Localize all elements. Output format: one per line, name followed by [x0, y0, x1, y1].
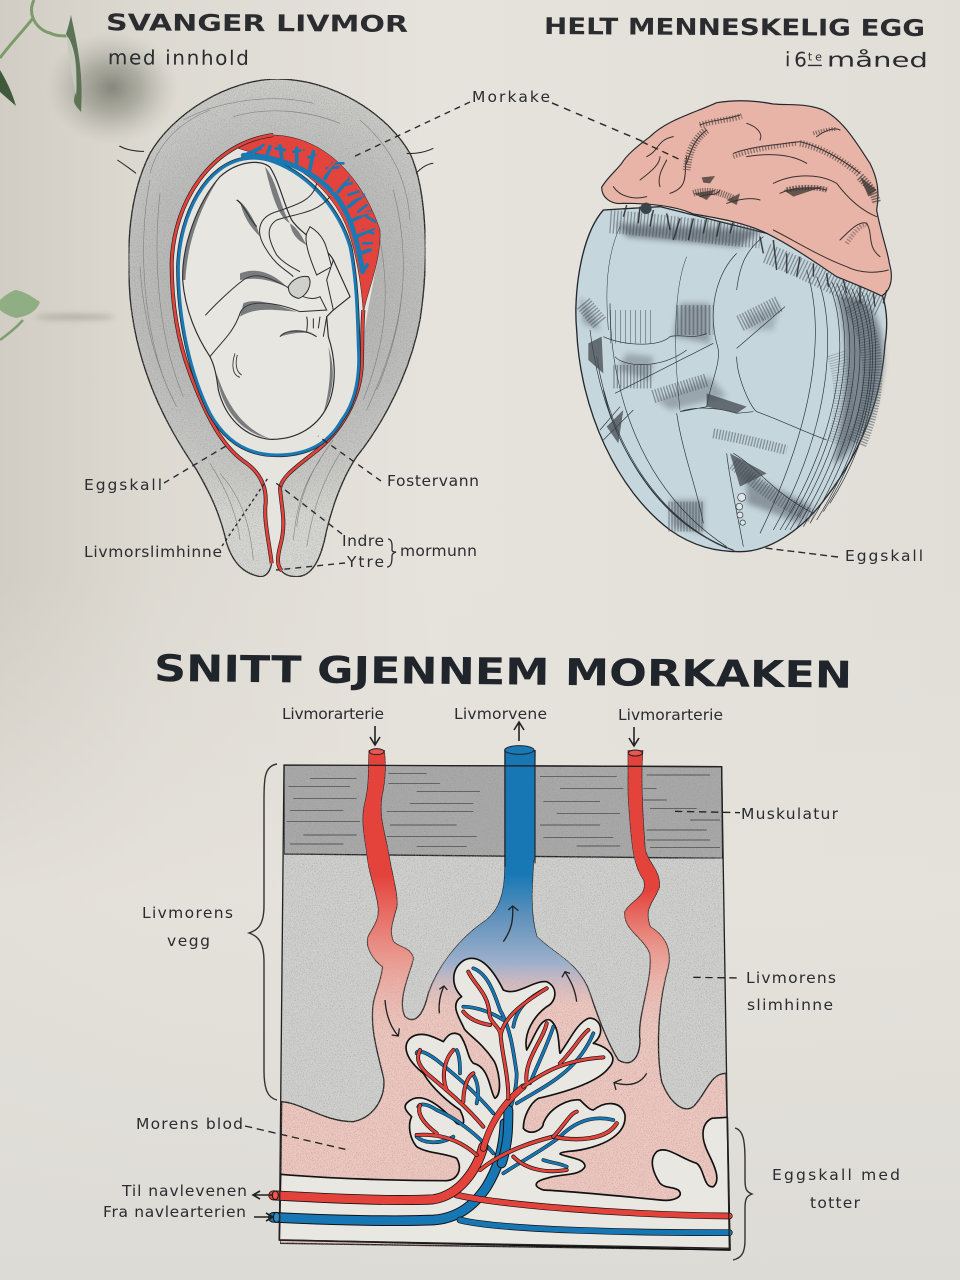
- placenta hatched folds: [687, 116, 877, 243]
- brace: mormunn: [387, 539, 396, 567]
- vessel ends left: [272, 1191, 280, 1222]
- heading: svanger livmor: SVANGER LIVMOR: [106, 10, 409, 38]
- title: snitt gjennem morkaken: SNITT GJENNEM MORKAKEN: [154, 647, 852, 697]
- icon: plant stems and leaves: [0, 0, 82, 340]
- diagram: placenta section: [245, 746, 740, 1250]
- brace: Livmorens vegg: [249, 764, 277, 1100]
- label: Livmorens vegg: vegg: [167, 932, 210, 950]
- mucous membrane: [281, 853, 727, 1157]
- label: Livmorvene: Livmorvene: [454, 705, 547, 723]
- uterine cavity: [172, 135, 380, 570]
- heading: helt menneskelig egg: HELT MENNESKELIG EGG: [544, 14, 925, 42]
- fetal veins (blue tree): [273, 968, 729, 1233]
- leader ticks inside section: [245, 811, 740, 1149]
- leader: Eggskall right: [765, 548, 838, 557]
- heading: helt menneskelig egg: [544, 14, 928, 72]
- label: Indre: Indre: [342, 532, 384, 550]
- label: Livmorslimhinne: Livmorslimhinne: [84, 543, 222, 561]
- label: mormunn: mormunn: [400, 542, 477, 560]
- label: Livmorens slimhinne: [746, 969, 836, 1014]
- label: Eggskall med totter: totter: [810, 1194, 861, 1212]
- blue egg membrane: [178, 158, 359, 455]
- low leaf shadow: [35, 314, 115, 320]
- label: Ytre: Ytre: [346, 553, 384, 571]
- placenta red crescent: [233, 135, 380, 313]
- label: Til navlevenen: Til navlevenen: [121, 1182, 247, 1200]
- chorion and villi: [279, 958, 730, 1250]
- label: Eggskall: Eggskall: [84, 476, 162, 494]
- leader lines: uterus: [164, 102, 470, 570]
- label: Livmorvene: [454, 705, 547, 741]
- heading: svanger livmor: [106, 10, 409, 71]
- section frame: [279, 765, 729, 1248]
- fetal arteries (red tree): [273, 972, 729, 1216]
- placenta fringe: [623, 205, 887, 307]
- label: Eggskall med totter: Eggskall med: [772, 1166, 900, 1184]
- label: Fostervann: Fostervann: [387, 472, 479, 490]
- leader: Morkake to egg: [552, 103, 682, 158]
- label: Livmorarterie right: Livmorarterie: [618, 706, 723, 724]
- label: Eggskall med totter: [772, 1166, 900, 1212]
- label: Morkake: Morkake: [472, 88, 550, 106]
- maternal blood space: [280, 750, 730, 1250]
- placenta cake: [602, 101, 891, 296]
- brace: Eggskall med totter: [733, 1128, 752, 1260]
- leader inside placenta: [642, 142, 679, 159]
- placenta red ribs: [273, 143, 375, 247]
- muscle layer: [284, 765, 723, 858]
- label: Fra navlearterien: Fra navlearterien: [103, 1203, 246, 1221]
- diagram: human egg: [576, 101, 891, 552]
- fetus body: [183, 162, 350, 439]
- label: Livmorens vegg: Livmorens: [142, 904, 233, 922]
- fetus shading and limbs: [205, 183, 350, 377]
- heading: svanger livmor: med innhold: [108, 45, 249, 70]
- labels: uterus: [84, 102, 479, 571]
- red uterine lining: [172, 135, 363, 571]
- heading: helt menneskelig egg: i 6: [785, 47, 807, 71]
- egg curved lines: [590, 227, 876, 552]
- vessel colour fades: [360, 750, 672, 1040]
- vessel tops: [369, 746, 642, 867]
- diagram: uterus cross-section: [117, 79, 433, 577]
- toes: [736, 493, 746, 525]
- uterine ligament lines: [117, 146, 433, 173]
- section ground: [279, 765, 730, 1250]
- label: Muskulatur: Muskulatur: [741, 805, 839, 823]
- wall muscle fibres: [140, 99, 410, 560]
- label: Eggskall right: Eggskall: [845, 547, 923, 565]
- heading: helt menneskelig egg: te: [808, 50, 822, 63]
- plant shadow: [46, 32, 178, 144]
- label: Livmorarterie left: Livmorarterie: [282, 705, 384, 723]
- flow arrows: [385, 906, 647, 1090]
- egg dark shading: [580, 223, 883, 533]
- egg sac: [576, 207, 887, 552]
- fetal foot and hand: [588, 337, 767, 487]
- placenta dark hatches: [693, 176, 877, 205]
- label: Livmorens slimhinne: slimhinne: [747, 996, 833, 1014]
- label: Livmorarterie left: [282, 705, 384, 745]
- heading: helt menneskelig egg: måned: [827, 48, 928, 72]
- uterus wall: [129, 79, 425, 577]
- egg hatching: [583, 222, 880, 517]
- fetus dark hatching: [183, 167, 333, 439]
- label: Livmorens vegg: [142, 904, 233, 950]
- label: Livmorens slimhinne: Livmorens: [746, 969, 836, 987]
- placenta surface folds: [613, 115, 888, 272]
- label: Morens blod: Morens blod: [136, 1115, 243, 1133]
- label: Livmorarterie right: [618, 706, 723, 746]
- placenta villi: [243, 145, 375, 272]
